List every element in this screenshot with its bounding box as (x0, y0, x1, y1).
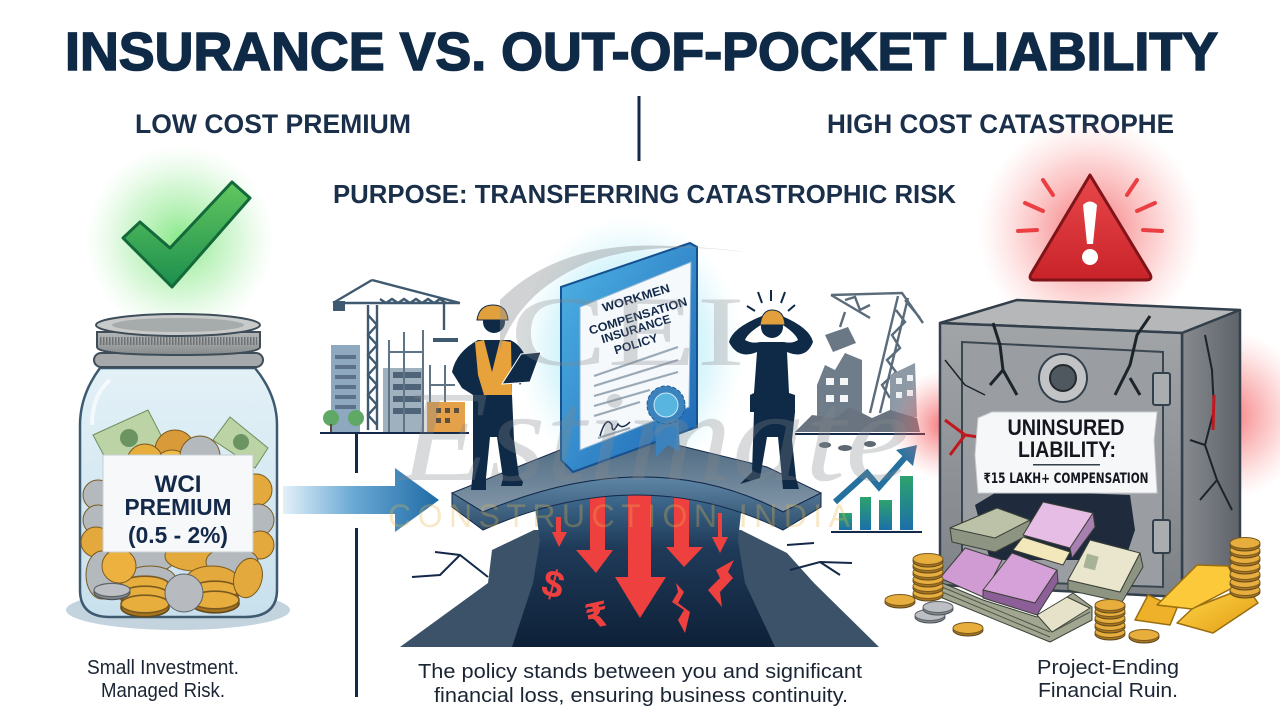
jar ring (94, 353, 263, 367)
hinges (1153, 373, 1170, 553)
caption: policy stands between: financial loss, ensuring business continuity. (434, 685, 848, 707)
jar label: (0.5 - 2%) (128, 522, 228, 548)
safe top (940, 300, 1240, 333)
worker with clipboard (452, 305, 541, 490)
coins in jar (81, 430, 274, 599)
lower pink bundle (983, 553, 1057, 603)
caption: small investment (87, 657, 239, 702)
gold bars (1135, 565, 1258, 633)
currency symbols: $ (537, 562, 569, 608)
jar shadow (66, 590, 290, 630)
safe door (962, 342, 1163, 587)
cream band (1013, 537, 1070, 565)
banknotes in jar (93, 410, 268, 468)
lid knurling (100, 337, 257, 345)
arrow: premium to policy (283, 468, 439, 532)
orange building (427, 402, 465, 432)
caption: policy stands between: The policy stands between you and significant (418, 661, 862, 683)
pit cracks (412, 543, 852, 577)
panel: jar of coins (66, 314, 290, 630)
safe label (975, 412, 1157, 493)
left column divider (355, 433, 358, 697)
trees (323, 410, 364, 426)
title: INSURANCE VS. OUT-OF-POCKET LIABILITY (65, 22, 1218, 82)
crane collapsed (831, 293, 923, 413)
document title: POLICY (612, 331, 660, 357)
red cracks (945, 395, 1214, 455)
bottom stack (940, 582, 1092, 642)
pit rock sides (400, 530, 879, 647)
grey building (383, 368, 423, 432)
signature (600, 422, 630, 436)
cracks (945, 316, 1232, 510)
watermark swoosh (500, 245, 745, 350)
document title (587, 281, 689, 357)
rubble (795, 407, 920, 432)
safe label: LIABILITY: (1018, 437, 1116, 462)
safe label: UNINSURED (1008, 415, 1124, 440)
watermark subtitle: CONSTRUCTION INDIA (388, 498, 851, 534)
dial (1039, 354, 1087, 402)
safety vest (475, 340, 512, 395)
jar label (103, 455, 253, 552)
worried worker (729, 290, 813, 489)
panel: cracked safe (885, 300, 1260, 643)
watermark CEI letters: CEI (510, 276, 745, 387)
jar body (80, 368, 277, 617)
watermark logo (388, 245, 910, 534)
heading: purpose: PURPOSE: TRANSFERRING CATASTROPHIC RISK (333, 179, 956, 209)
jar highlights (92, 380, 110, 425)
hard hat (477, 305, 508, 320)
document title: COMPENSATION (587, 294, 689, 338)
pit with falling losses (400, 495, 879, 647)
ruined building (817, 353, 862, 427)
red glows around safe (890, 330, 1280, 500)
right bundle (1068, 553, 1143, 602)
pit with falling losses: ₹ (581, 594, 613, 638)
money pile (940, 502, 1143, 642)
blue tower (331, 345, 360, 432)
caption: project-ending (1037, 657, 1179, 702)
coin stacks (885, 538, 1260, 643)
policy document (561, 243, 697, 472)
ribbon seal (647, 386, 685, 457)
left city construction scene (320, 280, 469, 434)
upper pink bundle (1023, 502, 1093, 548)
stress marks (747, 290, 795, 311)
document title: WORKMEN (600, 281, 672, 315)
hard hat (760, 310, 785, 325)
loss arrows (552, 495, 734, 633)
heading: high cost catastrophe: HIGH COST CATASTROPHE (827, 109, 1174, 139)
caption: project-ending: Project-Ending (1037, 657, 1179, 679)
document lines (594, 347, 678, 438)
bridge deck (452, 441, 821, 530)
jar label: PREMIUM (124, 494, 232, 520)
policy glow (515, 215, 745, 485)
document cover (561, 243, 697, 472)
document paper (580, 262, 691, 450)
broken hole (975, 490, 1135, 560)
caption: project-ending: Financial Ruin. (1038, 680, 1178, 702)
growth chart (831, 445, 922, 533)
safe side (1182, 310, 1240, 597)
caption: small investment: Managed Risk. (101, 680, 225, 702)
icon: warning triangle (978, 118, 1202, 342)
safe front (940, 323, 1182, 597)
left pink bundle (940, 548, 1002, 597)
safe label: ₹15 LAKH+ COMPENSATION (984, 471, 1148, 487)
caption: policy stands between (418, 661, 862, 707)
ground (320, 432, 469, 434)
jar label: WCI (154, 471, 202, 498)
jar lid (97, 332, 260, 355)
top center divider (638, 96, 640, 161)
watermark script name: Estimate (398, 365, 910, 509)
right city collapsed construction scene (795, 293, 925, 451)
back bundle (950, 508, 1030, 552)
icon: green check mark (85, 145, 275, 335)
crane (333, 280, 460, 430)
document title: INSURANCE (600, 312, 672, 346)
pit dark interior (512, 495, 775, 647)
heading: low cost premium: LOW COST PREMIUM (135, 109, 411, 139)
caption: small investment: Small Investment. (87, 657, 239, 679)
clipboard (502, 352, 541, 384)
